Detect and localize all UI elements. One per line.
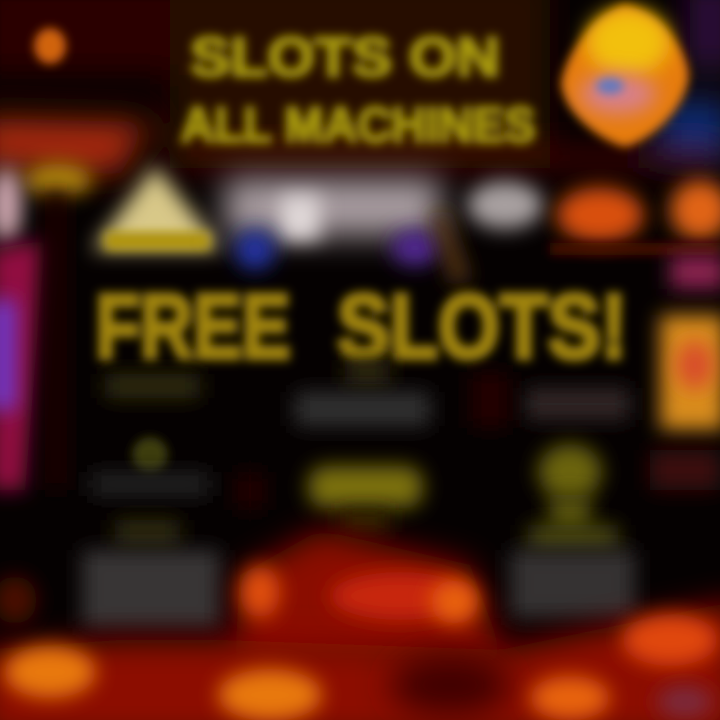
column one details — [82, 437, 220, 628]
top left lamp — [34, 28, 66, 64]
lava floor — [0, 530, 720, 720]
main heading: FREE — [96, 276, 290, 378]
banner heading: SLOTS ON — [190, 25, 500, 88]
marquee light row — [0, 164, 720, 285]
top banner background — [0, 0, 720, 175]
icon: flame badge — [568, 8, 682, 140]
column three details — [510, 444, 635, 618]
left machine edge — [0, 190, 67, 490]
sub labels — [105, 360, 630, 510]
main heading — [96, 276, 627, 378]
column two details — [308, 466, 423, 532]
main heading: SLOTS! — [337, 276, 627, 378]
banner heading: ALL MACHINES — [180, 97, 536, 153]
right machine edge — [650, 255, 720, 490]
banner heading — [180, 25, 536, 153]
